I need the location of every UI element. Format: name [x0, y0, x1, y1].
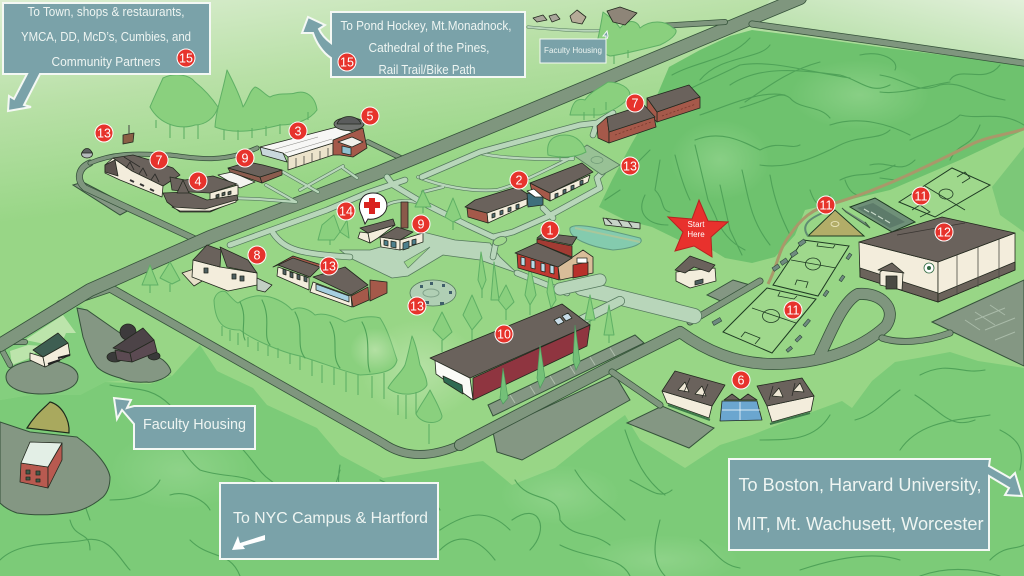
marker 11 upper field: 11: [915, 190, 928, 204]
building 13: brick wing: [273, 256, 387, 307]
faculty house green roof: [30, 333, 70, 367]
building 7 west hall: [105, 155, 180, 197]
marker 15 town: 15: [179, 52, 193, 66]
marker 12: [935, 223, 953, 241]
marker 1: [541, 221, 559, 239]
marker 13 gazebo: [95, 124, 113, 142]
building 8: residence: [182, 245, 272, 292]
soccer field lower: [723, 288, 816, 353]
callout: faculty housing south: Faculty Housing: [143, 417, 246, 433]
marker 4: 4: [195, 174, 202, 188]
marker 15 town: [177, 49, 195, 67]
marker 14: [337, 202, 355, 220]
callout text: to pond hockey: Rail Trail/Bike Path: [378, 63, 476, 77]
building 12: athletic centre: [859, 217, 1015, 302]
callout text: to Boston: MIT, Mt. Wachusett, Worcester: [736, 513, 984, 534]
arrow: to NYC: [232, 535, 265, 550]
pale corner field: [752, 0, 1024, 64]
callout text: to town: To Town, shops & restaurants,: [28, 5, 184, 19]
wooded hill: [599, 30, 1024, 263]
marker 11 lower field: 11: [787, 304, 800, 318]
marker 7 west: 7: [156, 154, 163, 168]
treeline top centre: [595, 12, 676, 64]
dirt path: [768, 128, 1024, 284]
marker 1: 1: [547, 224, 554, 238]
marker 8: 8: [254, 248, 261, 262]
marker 6: [732, 371, 750, 389]
star: start here: [668, 200, 728, 257]
callout: faculty housing south: [114, 398, 255, 449]
marker 11 lower field: [784, 301, 802, 319]
building 2: dormitory pair: [465, 163, 593, 223]
marker 13 seating circle: [408, 297, 426, 315]
central wood: [214, 291, 442, 444]
building 14: health centre: [358, 219, 395, 243]
marker 7 west: [150, 151, 168, 169]
building 1: red hall: [515, 233, 593, 280]
campus walking paths: [228, 113, 694, 320]
marker 9 west: [236, 149, 254, 167]
faculty brick apartment: [20, 442, 62, 488]
soccer field middle: [773, 240, 849, 296]
campus small trees: [142, 190, 614, 352]
marker 9 west: 9: [242, 152, 249, 166]
callout text: to pond hockey: Cathedral of the Pines,: [368, 41, 490, 55]
callout text: to pond hockey: To Pond Hockey, Mt.Monadnock,: [340, 19, 512, 33]
seating circle: [410, 280, 456, 306]
marker 9 central: [412, 215, 430, 233]
callout text: to town: Community Partners: [52, 55, 160, 69]
smokestack: [401, 202, 408, 228]
building 10: barn: [430, 304, 590, 400]
building 6: east hall: [662, 371, 814, 424]
building: welcome house: [675, 256, 716, 288]
faculty house dark roof: [107, 324, 160, 362]
parking lots and secondary roads: [0, 182, 1024, 515]
callout: to town: [3, 3, 210, 111]
callout: to NYC: [220, 483, 438, 559]
barn side trees: [500, 325, 580, 404]
callout: faculty housing north: Faculty Housing: [544, 45, 602, 55]
marker 12: 12: [937, 226, 951, 240]
faculty play area triangle: [27, 402, 69, 433]
callout text: to town: [21, 5, 191, 69]
marker 3: [289, 122, 307, 140]
bleachers: [712, 239, 852, 352]
gazebo: [82, 148, 92, 158]
callout: to pond hockey: [302, 12, 525, 77]
small trees by residence halls: [548, 82, 630, 160]
marker 3: 3: [295, 124, 302, 138]
marker 13 gazebo: 13: [97, 126, 111, 140]
greenhouse row by the pond: [603, 218, 640, 229]
building 9: central hall: [380, 227, 423, 250]
callout text: to Boston: [736, 474, 984, 534]
small tower: [123, 125, 134, 144]
building 4: main hall: [163, 172, 255, 212]
pond: [570, 226, 641, 250]
callout text: to town: YMCA, DD, McD’s, Cumbies, and: [21, 30, 191, 44]
callout text: to pond hockey: [340, 19, 512, 77]
tennis courts: [850, 198, 915, 232]
marker 15 pond: 15: [340, 56, 354, 70]
marker 10: 10: [497, 328, 511, 342]
marker 11 diamond: 11: [820, 198, 833, 212]
building 9: west annex: [228, 162, 282, 183]
soccer field upper right: [899, 168, 990, 217]
marker 7 east: 7: [632, 96, 639, 110]
star: start here: Here: [687, 230, 705, 239]
perimeter road: [60, 142, 950, 455]
faculty houses north: [533, 7, 637, 25]
star: start here: Start: [688, 220, 705, 229]
marker 15 pond: [338, 53, 356, 71]
marker 5: 5: [367, 110, 374, 124]
marker 14: 14: [339, 204, 353, 218]
marker 8: [248, 246, 266, 264]
marker 9 central: 9: [418, 218, 425, 232]
marker 11 upper field: [912, 187, 930, 205]
marker 13 brick wing: 13: [322, 260, 336, 274]
basketball court: [573, 145, 620, 175]
marker 7 east: [626, 94, 644, 112]
marker 13 brick wing: [320, 257, 338, 275]
building 7: brick residence halls: [597, 85, 700, 143]
glow on the lawn by the woods: [360, 320, 480, 420]
marker 13 court: 13: [623, 160, 637, 174]
main road: [0, 0, 1024, 345]
treeline top left: [150, 70, 317, 140]
marker 2: 2: [516, 174, 523, 188]
marker 10: [495, 325, 513, 343]
baseball diamond: [805, 208, 870, 236]
marker 5: [361, 107, 379, 125]
callout: to NYC: To NYC Campus & Hartford: [233, 510, 428, 527]
callout text: to Boston: To Boston, Harvard University,: [738, 474, 982, 495]
marker 13 court: [621, 157, 639, 175]
callout: faculty housing north: [540, 31, 608, 63]
callout: to Boston: [729, 459, 1022, 550]
marker 11 diamond: [817, 196, 835, 214]
marker 2: [510, 171, 528, 189]
marker 4: [189, 172, 207, 190]
marker 13 seating circle: 13: [410, 300, 424, 314]
woodland foreground: [0, 305, 1024, 576]
icon: red cross bubble: [359, 193, 387, 224]
marker 6: 6: [738, 374, 745, 388]
building 3: arts centre: [260, 116, 367, 170]
